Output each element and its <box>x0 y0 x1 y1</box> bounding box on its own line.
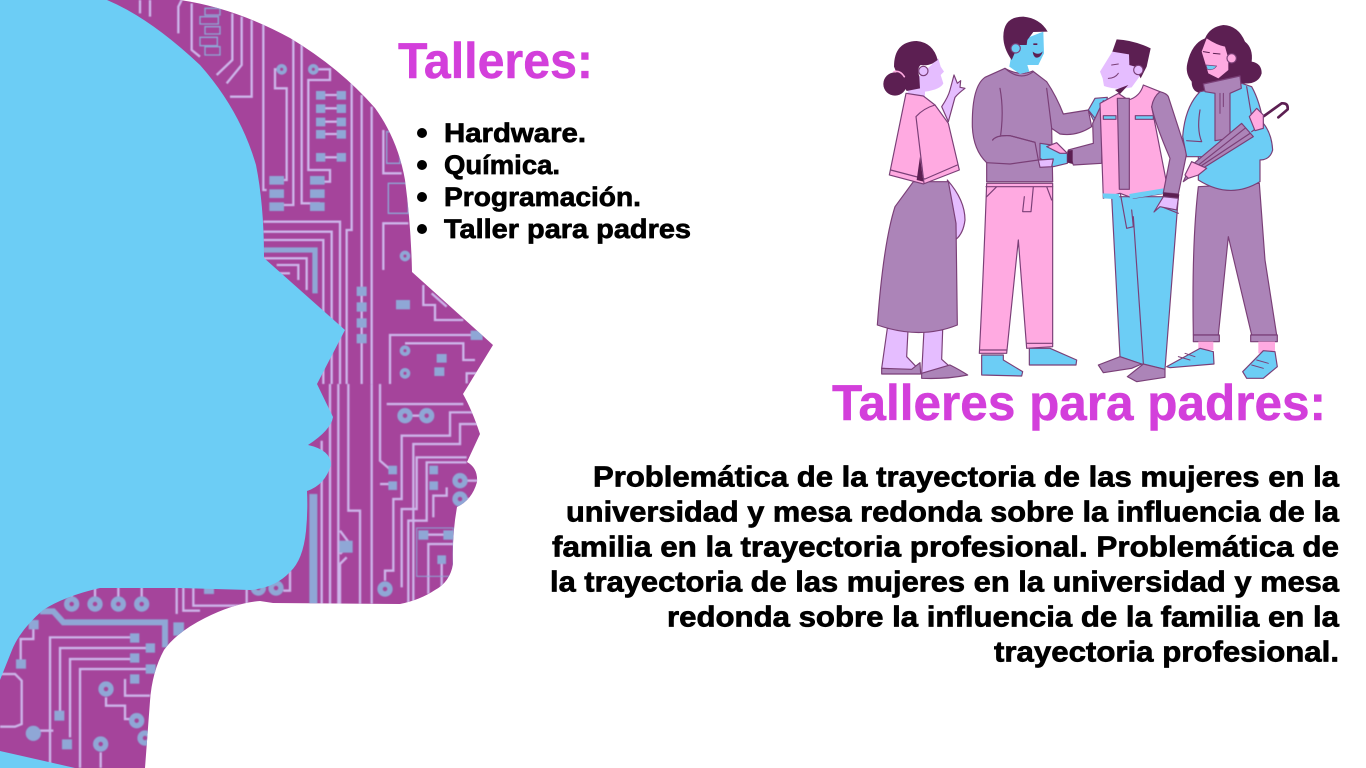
workshop list: Hardware. <box>444 118 586 148</box>
illustration: human head silhouette with circuit board <box>0 0 493 768</box>
person: woman with umbrella <box>1167 25 1288 378</box>
person: man with vest <box>1047 39 1187 382</box>
paragraph: description: universidad y mesa redonda sobre la influencia de la <box>566 496 1340 528</box>
head silhouette: purple circuit board <box>0 0 493 768</box>
heading: Talleres para padres: Talleres para padres: <box>832 375 1326 431</box>
illustration: group of four people talking <box>877 17 1288 382</box>
circuit traces <box>0 0 483 768</box>
paragraph: description: familia en la trayectoria profesional. Problemática de <box>552 532 1339 564</box>
workshop list: Taller para padres <box>444 214 691 244</box>
head silhouette: blue face profile <box>0 0 345 680</box>
person: man shaking hands (blue skin) <box>972 17 1108 376</box>
paragraph: description: Problemática de la trayectoria de las mujeres en la <box>593 462 1340 494</box>
heading: Talleres: Talleres: <box>398 33 593 89</box>
workshop list: Química. <box>444 150 560 180</box>
person: woman with bun <box>877 41 968 379</box>
paragraph: description: redonda sobre la influencia de la familia en la <box>667 602 1340 634</box>
paragraph: description: la trayectoria de las mujeres en la universidad y mesa <box>550 566 1340 598</box>
blue corner <box>0 751 75 768</box>
paragraph: description: trayectoria profesional. <box>994 636 1339 668</box>
paragraph: description <box>550 462 1340 668</box>
workshop list <box>417 118 691 244</box>
workshop list: Programación. <box>444 182 641 212</box>
